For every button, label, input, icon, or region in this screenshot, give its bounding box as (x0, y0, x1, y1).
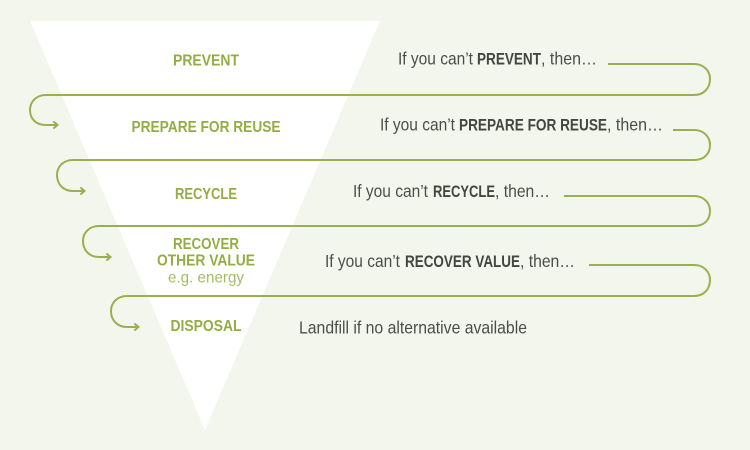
level label: recover other value: OTHER VALUE (157, 252, 255, 270)
text: if you can't recycle: , then… (495, 181, 550, 201)
text: if you can't recover value: , then… (520, 251, 575, 271)
text: if you can't prepare for reuse: PREPARE FOR REUSE (459, 116, 607, 134)
text: if you can't prevent: If you can’t (398, 48, 473, 68)
inverted triangle (30, 21, 380, 430)
text: if you can't prevent: PREVENT (477, 50, 541, 68)
text: if you can't prevent: , then… (541, 48, 597, 68)
level label: recover other value: e.g. energy (168, 270, 244, 286)
text: if you can't recycle (353, 181, 550, 201)
level label: prepare for reuse: PREPARE FOR REUSE (132, 119, 281, 136)
level label: recover other value (157, 236, 255, 286)
arrow: prevent to prepare for reuse (30, 64, 710, 128)
text: if you can't recycle: RECYCLE (433, 183, 495, 201)
level label: recycle: RECYCLE (175, 186, 237, 203)
text: if you can't prevent (398, 48, 597, 68)
text: landfill: Landfill if no alternative available (299, 318, 527, 338)
text: if you can't recover value: RECOVER VALUE (405, 253, 520, 271)
text: if you can't prepare for reuse (380, 114, 663, 134)
text: if you can't prepare for reuse: , then… (607, 114, 663, 134)
level label: prevent: PREVENT (173, 52, 239, 70)
arrow: recover to disposal (111, 265, 710, 330)
text: if you can't prepare for reuse: If you can’t (380, 114, 455, 134)
text: if you can't recycle: If you can’t (353, 181, 428, 201)
text: if you can't recover value (325, 251, 575, 271)
arrow: recycle to recover (83, 196, 710, 260)
text: if you can't recover value: If you can’t (325, 251, 400, 271)
arrow: prepare for reuse to recycle (57, 130, 710, 194)
level label: recover other value: RECOVER (173, 236, 239, 253)
level label: disposal: DISPOSAL (170, 318, 242, 335)
